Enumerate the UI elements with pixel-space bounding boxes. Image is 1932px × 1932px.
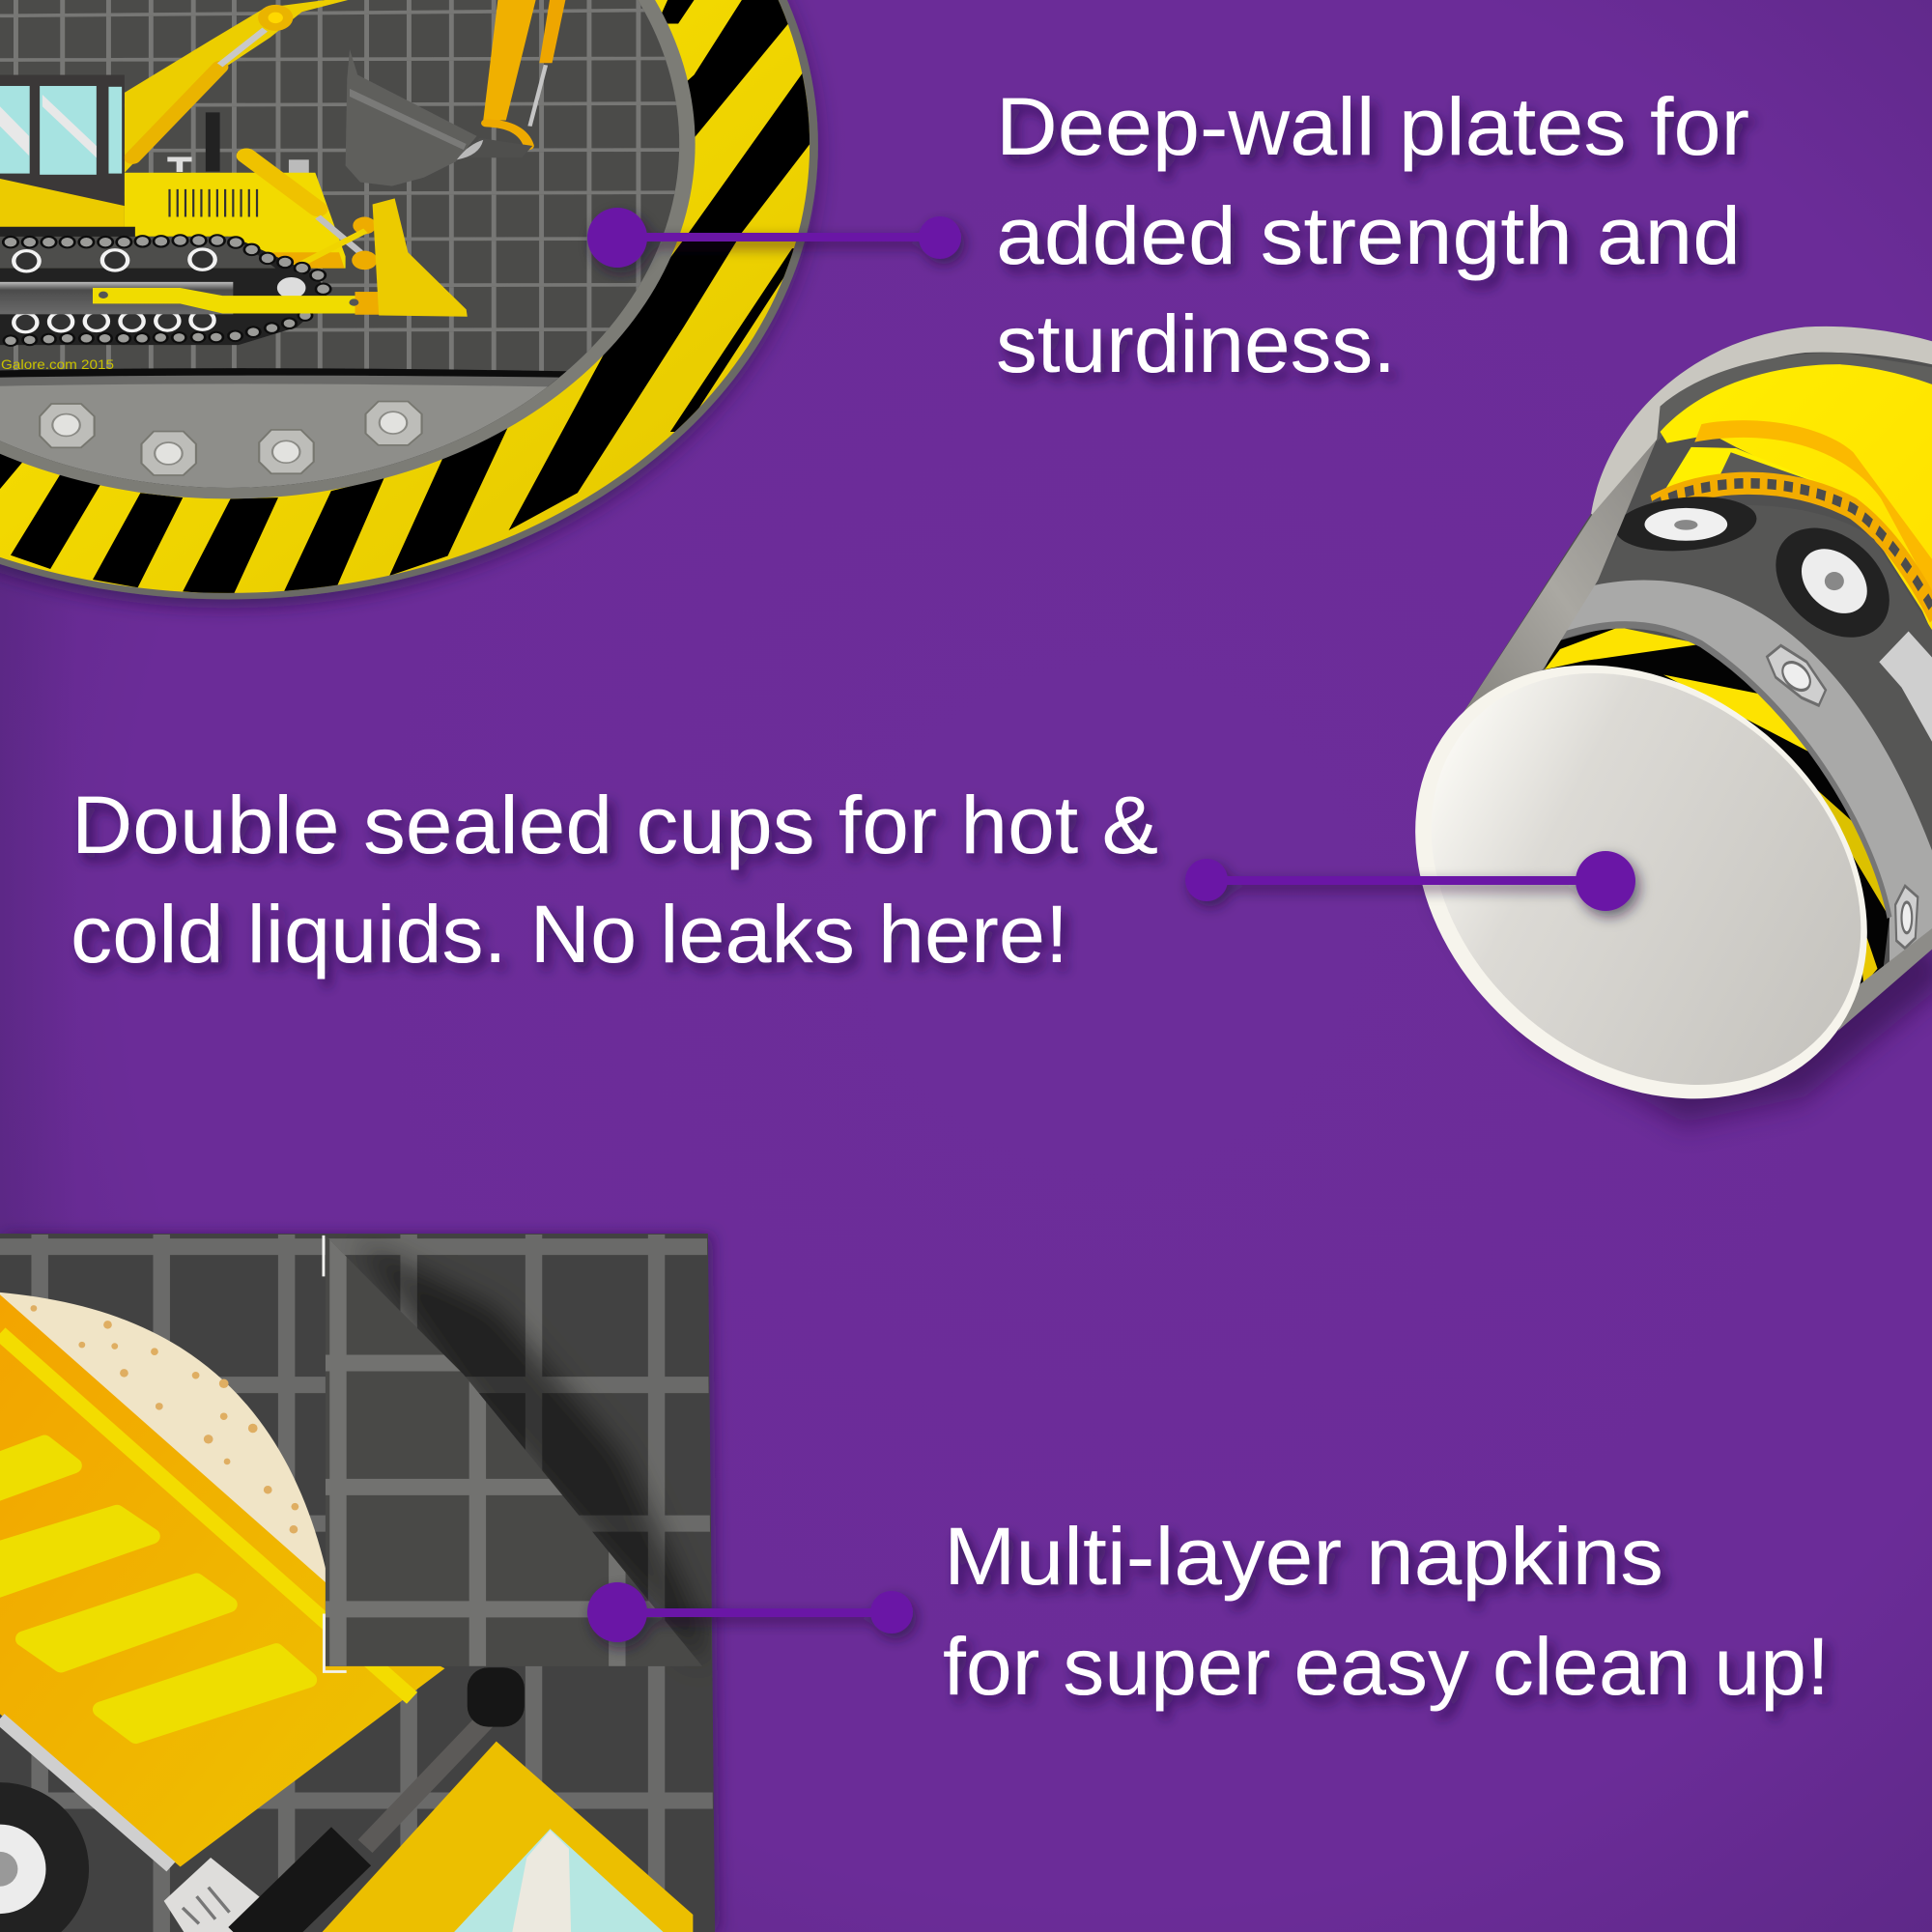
cup grey block: [1719, 452, 1839, 491]
cup tyre right: [1767, 508, 1899, 657]
folded corner shadow: [355, 1240, 702, 1666]
excavator stick: [467, 0, 566, 157]
bulldozer body: [125, 156, 378, 280]
ring edge: [1560, 625, 1889, 918]
bulldozer blade: [373, 198, 468, 317]
text: napkins: Multi-layer napkins: [944, 1511, 1663, 1602]
truck cab: [309, 1742, 693, 1932]
cup photo: [1433, 327, 1932, 1122]
cup base outer rim: [1328, 576, 1932, 1188]
text: cups: Double sealed cups for hot &: [71, 780, 1158, 870]
cup left paper edge: [1450, 440, 1657, 733]
text: napkins: for super easy clean up!: [943, 1621, 1830, 1712]
truck bed: [0, 1294, 444, 1866]
bolts: [40, 402, 422, 475]
text: plates: Deep-wall plates for: [996, 81, 1749, 172]
tracks: [0, 227, 382, 346]
text: cups: cold liquids. No leaks here!: [71, 889, 1068, 980]
metal panel: [0, 368, 566, 488]
exhaust and fittings: [167, 112, 309, 173]
truck bed slats: [0, 1443, 309, 1736]
truck arm: [248, 1667, 525, 1932]
cup yellow vehicle art: [1661, 364, 1932, 641]
cup tyre left: [1614, 492, 1757, 555]
excavator bucket: [346, 49, 483, 186]
cup orange track: [1653, 483, 1932, 616]
cup lower paper edge: [1837, 925, 1932, 1031]
plate well rim: [0, 0, 696, 498]
text: plates: [996, 81, 1749, 389]
connector: cup: [1185, 851, 1635, 911]
text: cups: [71, 780, 1158, 980]
cup metal ring: [1565, 581, 1932, 969]
plate rim: [0, 0, 818, 599]
dark band under lip: [1657, 353, 1932, 442]
truck wheel: [0, 1782, 89, 1932]
cup body: [1450, 327, 1932, 1030]
cup base: [1328, 576, 1932, 1188]
folded corner: [304, 1217, 702, 1673]
connector: napkin: [587, 1582, 913, 1642]
cup lower yellow patch: [1655, 447, 1846, 506]
cup shadow: [1433, 769, 1932, 1122]
plate copyright text: Galore.com 2015: [1, 356, 114, 372]
text: plates: sturdiness.: [996, 298, 1396, 389]
napkin photo: [0, 1217, 721, 1932]
plate photo: [0, 0, 848, 631]
excavator boom: [125, 0, 371, 173]
text: napkins: [943, 1511, 1830, 1712]
truck bed silver edge: [0, 1719, 171, 1866]
plate floor with grid: [0, 0, 680, 488]
left edge shading: [0, 541, 77, 1314]
excavator cab: [0, 75, 125, 229]
truck grille: [164, 1858, 265, 1932]
text: plates: added strength and: [996, 190, 1741, 281]
cup right block: [1879, 631, 1932, 749]
cup top lip: [1591, 327, 1932, 519]
napkin base with grid: [0, 1217, 721, 1932]
cup bolts: [1767, 645, 1918, 949]
cup hazard stripes: [1545, 626, 1889, 994]
cup lower body: [1595, 505, 1932, 871]
truck window: [444, 1829, 674, 1932]
connector: plate: [587, 208, 961, 268]
hazard stripe border: [0, 0, 810, 593]
cup base disc: [1349, 588, 1932, 1170]
truck dome cream: [0, 1293, 330, 1589]
cup orange stripe: [1694, 420, 1932, 601]
truck bed yellow strip: [0, 1333, 412, 1698]
